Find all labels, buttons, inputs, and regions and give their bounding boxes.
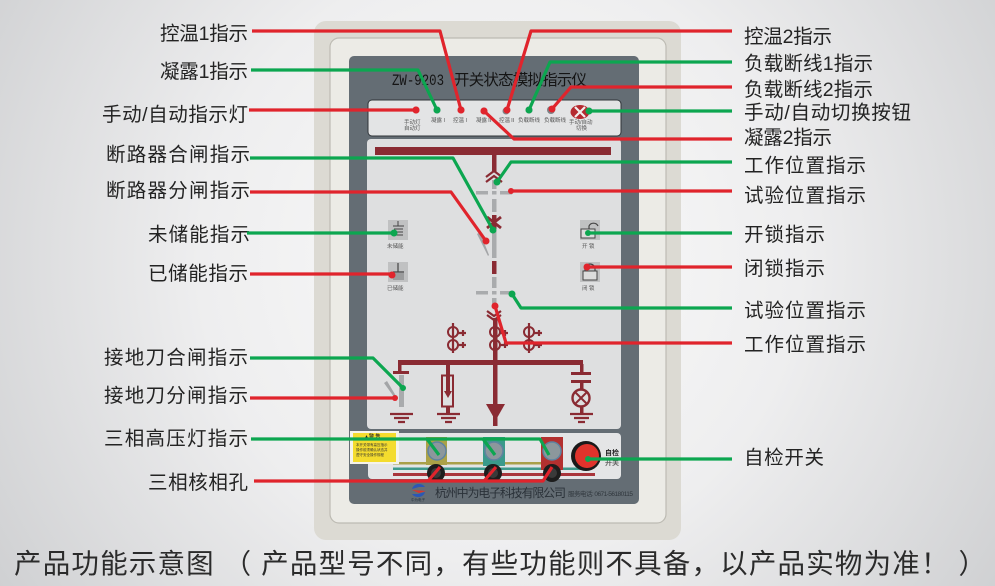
indicator captions: 凝露Ⅰ bbox=[431, 116, 448, 124]
breaker cross bbox=[487, 215, 501, 229]
leader: 断路器合闸 bbox=[250, 158, 496, 234]
warning sticker: 遵守安全操作规程 bbox=[356, 452, 384, 457]
icon: manual/auto switch button bbox=[570, 105, 590, 119]
label: 三相核相孔: 三相核相孔 bbox=[148, 472, 248, 494]
indicator captions: 手动灯 bbox=[404, 118, 421, 126]
warning sticker bbox=[350, 431, 399, 464]
self-check button bbox=[571, 441, 601, 471]
leader: 负载断线1 bbox=[526, 62, 732, 114]
phase stripes bbox=[393, 462, 595, 476]
panel: one-line circuit diagram bbox=[367, 139, 621, 429]
phase lamp B bbox=[483, 437, 505, 466]
leader: 凝露1 bbox=[251, 70, 440, 114]
label: 控温2指示: 控温2指示 bbox=[744, 26, 832, 48]
leader: 开锁 bbox=[585, 230, 732, 236]
earthing switch bbox=[384, 364, 413, 422]
label: 未储能指示: 未储能指示 bbox=[148, 224, 250, 246]
leader: 自检开关 bbox=[585, 456, 732, 462]
icon: unlocked: 开 锁 bbox=[582, 242, 595, 250]
breaker open blade bbox=[477, 232, 489, 256]
label: 自检开关: 自检开关 bbox=[744, 447, 824, 469]
label: 工作位置指示 lower: 工作位置指示 bbox=[744, 334, 866, 356]
warning sticker: 本开关带有高压指示 bbox=[356, 442, 388, 447]
device title bbox=[392, 71, 587, 90]
upper test dashes bbox=[476, 191, 512, 194]
device title: 开关状态模拟指示仪 bbox=[454, 71, 587, 89]
indicator captions: 负载断线 bbox=[544, 116, 567, 124]
panel: top indicator strip bbox=[368, 100, 621, 136]
indicator captions: 自动灯 bbox=[404, 124, 421, 132]
upper chevrons bbox=[486, 171, 502, 182]
indicator captions: 控温Ⅱ bbox=[499, 116, 516, 124]
label: 负载断线2指示: 负载断线2指示 bbox=[744, 79, 873, 101]
icon: uncharged spring bbox=[387, 220, 408, 250]
label: 负载断线1指示: 负载断线1指示 bbox=[744, 53, 873, 75]
callout lines: right side bbox=[480, 31, 732, 462]
icon: unlocked bbox=[580, 220, 600, 250]
service phone: 服务电话: 0671-56180115 bbox=[568, 489, 633, 498]
leader: 工作位置 lower bbox=[492, 302, 732, 343]
device title: ZW-9203 bbox=[392, 72, 444, 90]
company name: 杭州中为电子科技有限公司 bbox=[435, 485, 566, 500]
self-check caption bbox=[605, 448, 619, 467]
leader: 接地刀分闸 bbox=[250, 395, 398, 401]
leader: 断路器分闸 bbox=[250, 192, 490, 244]
leader: 手动/自动切换 bbox=[586, 108, 732, 114]
label: 试验位置指示 lower: 试验位置指示 bbox=[744, 300, 866, 322]
icon: company logo bbox=[411, 484, 426, 502]
leader: 已储能 bbox=[250, 272, 396, 278]
phase lamp A bbox=[426, 437, 447, 465]
leader: 接地刀合闸 bbox=[250, 358, 406, 391]
leader: 闭锁 bbox=[584, 264, 732, 270]
leader: 三相核相孔 bbox=[254, 467, 552, 481]
icon: charged spring: 已储能 bbox=[387, 284, 404, 292]
icon: uncharged spring: 未储能 bbox=[387, 242, 404, 250]
warning sticker: ▲警 告 bbox=[364, 433, 380, 440]
current transformers bbox=[448, 323, 542, 353]
label: 接地刀合闸指示: 接地刀合闸指示 bbox=[104, 347, 248, 369]
busbar bbox=[375, 147, 611, 155]
indicator captions bbox=[404, 116, 593, 132]
leader: 试验位置 upper bbox=[508, 188, 732, 194]
self-check caption: 自检 bbox=[605, 448, 619, 457]
indicator captions: 凝露Ⅱ bbox=[476, 116, 493, 124]
label: 闭锁指示: 闭锁指示 bbox=[744, 258, 825, 280]
indicator captions: 切换 bbox=[576, 124, 588, 132]
inner bevel bbox=[330, 38, 666, 523]
phase lamp C bbox=[541, 437, 563, 470]
arrester branch bbox=[437, 364, 460, 422]
label: 断路器合闸指示: 断路器合闸指示 bbox=[106, 144, 250, 166]
icon: locked bbox=[580, 262, 600, 292]
label: 凝露2指示: 凝露2指示 bbox=[744, 127, 832, 149]
indicator captions: 负载断线 bbox=[518, 116, 541, 124]
label: 凝露1指示: 凝露1指示 bbox=[160, 61, 248, 83]
leader: 负载断线2 bbox=[548, 87, 732, 112]
capacitor and lamp branch bbox=[570, 364, 593, 422]
label: 已储能指示: 已储能指示 bbox=[148, 263, 248, 285]
panel: lamp and self-check strip bbox=[350, 431, 621, 482]
label: 三相高压灯指示: 三相高压灯指示 bbox=[104, 428, 248, 450]
leader: 控温2 bbox=[504, 31, 732, 114]
label: 断路器分闸指示: 断路器分闸指示 bbox=[106, 180, 250, 202]
label: 接地刀分闸指示: 接地刀分闸指示 bbox=[104, 385, 248, 407]
main outgoing arrow bbox=[486, 404, 505, 418]
leader: 凝露2 bbox=[480, 108, 732, 139]
leader: 三相高压灯 bbox=[251, 439, 549, 455]
icon: charged spring bbox=[387, 262, 408, 292]
callout lines: left side bbox=[247, 31, 552, 481]
leader: 工作位置 upper bbox=[494, 162, 732, 186]
leader: 控温1 bbox=[252, 31, 464, 114]
phase sockets bbox=[427, 464, 561, 482]
right labels bbox=[744, 26, 911, 469]
indicator captions: 控温Ⅰ bbox=[453, 116, 470, 124]
label: 开锁指示: 开锁指示 bbox=[744, 224, 825, 246]
label: 试验位置指示 upper: 试验位置指示 bbox=[744, 185, 866, 207]
icon: locked: 闭 锁 bbox=[582, 284, 595, 292]
self-check caption: 开关 bbox=[605, 458, 619, 467]
lower test dashes bbox=[476, 291, 512, 294]
label: 手动/自动指示灯: 手动/自动指示灯 bbox=[102, 104, 248, 126]
leader: 试验位置 lower bbox=[508, 290, 732, 308]
leader: 手动/自动指示灯 bbox=[249, 106, 420, 114]
leader: 未储能 bbox=[247, 230, 398, 236]
warning sticker: 操作前须确认状态并 bbox=[356, 447, 388, 452]
lower bus bbox=[398, 360, 583, 365]
icon: company logo: 中为电子 bbox=[411, 497, 425, 502]
left labels bbox=[102, 23, 250, 494]
device: status indicator instrument bbox=[314, 21, 681, 540]
outer case bbox=[314, 21, 681, 540]
indicator captions: 手动/自动 bbox=[569, 118, 593, 126]
grey faceplate bbox=[349, 56, 639, 504]
label: 工作位置指示 upper: 工作位置指示 bbox=[744, 155, 866, 177]
label: 手动/自动切换按钮: 手动/自动切换按钮 bbox=[744, 102, 911, 124]
lower chevrons bbox=[487, 311, 501, 320]
label: 控温1指示: 控温1指示 bbox=[160, 23, 248, 45]
footer note: 产品功能示意图 （ 产品型号不同，有些功能则不具备，以产品实物为准！ ） bbox=[14, 548, 986, 579]
